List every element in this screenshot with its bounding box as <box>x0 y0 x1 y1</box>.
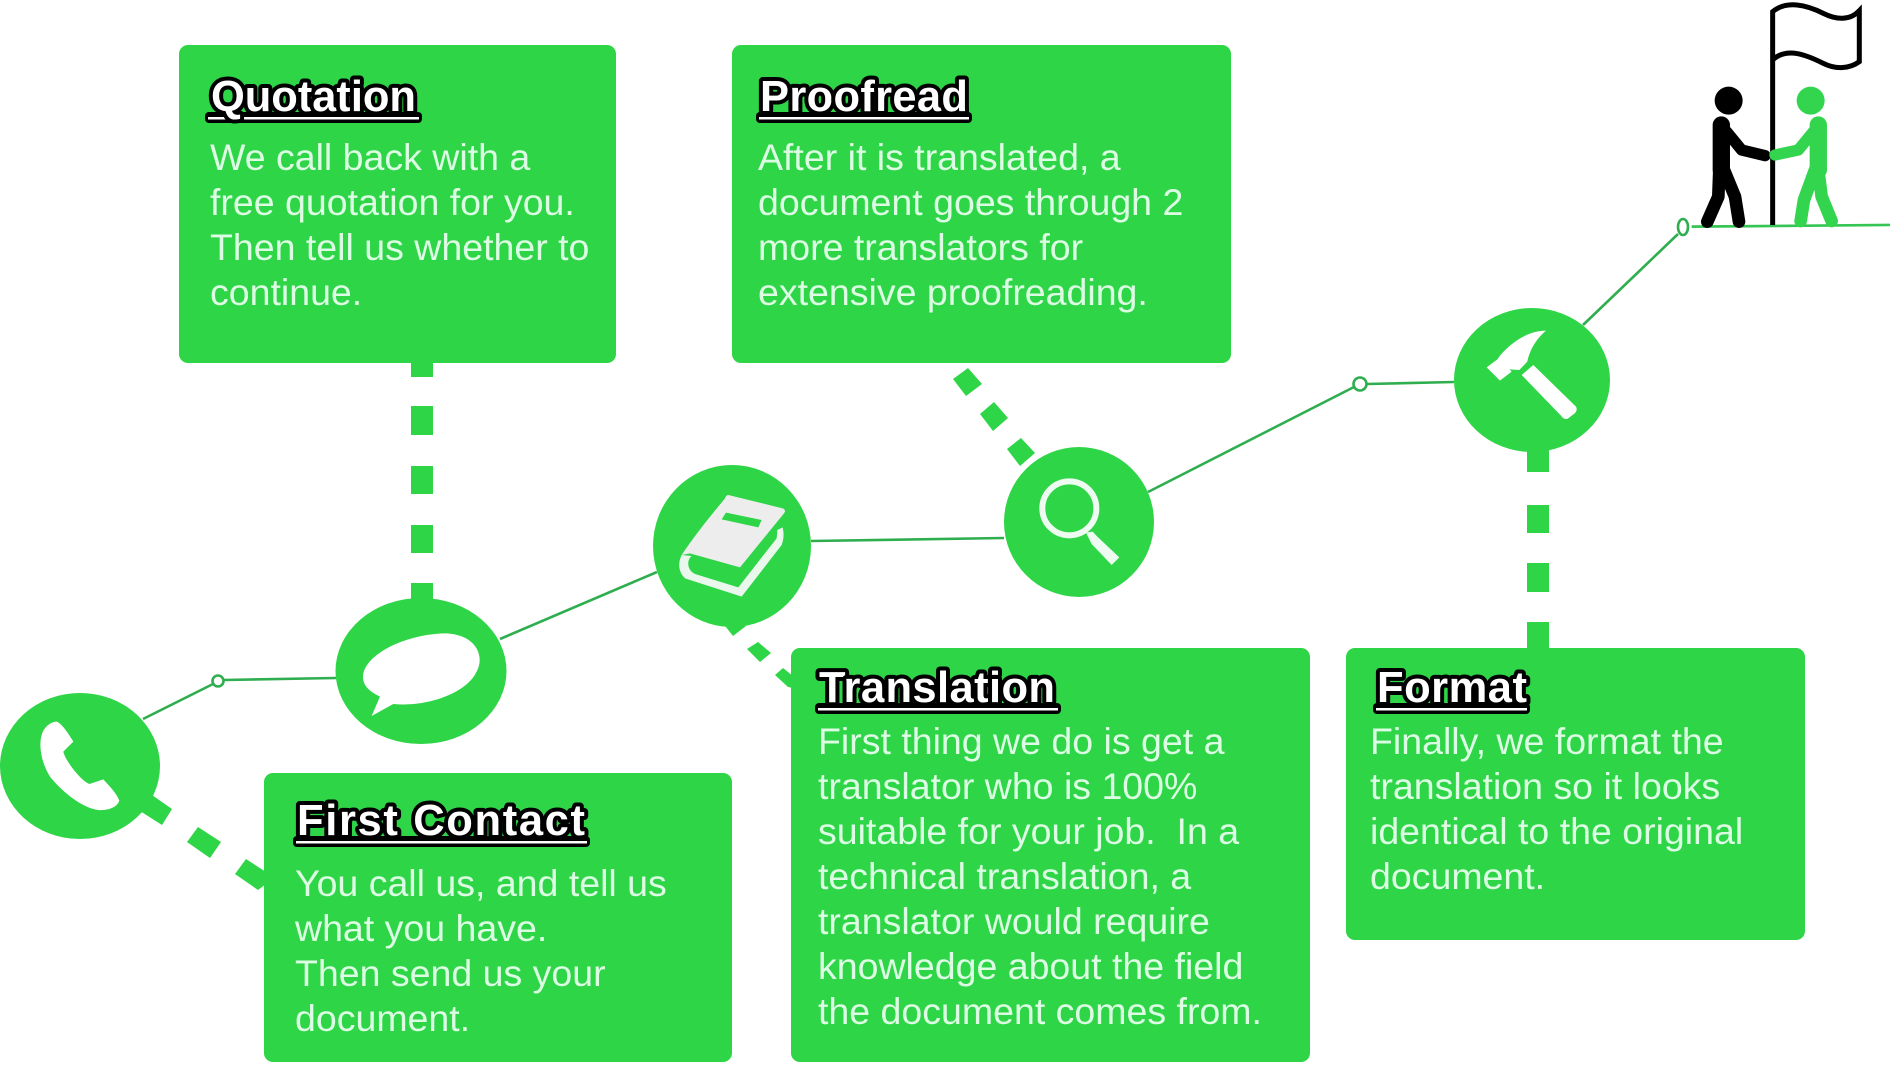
text: first contact body: Then send us your <box>295 952 606 994</box>
icon: flag and handshake figures <box>1692 5 1890 227</box>
icon: magnifier circle <box>1004 447 1154 597</box>
text: quotation body: Then tell us whether to <box>210 226 589 268</box>
dashed connector: quotation <box>411 360 433 603</box>
dashed connector: format <box>1527 448 1549 650</box>
black figure <box>1707 87 1765 222</box>
text: quotation body: We call back with a <box>210 136 530 178</box>
text: first contact body: document. <box>295 997 470 1039</box>
ground line <box>1692 225 1890 227</box>
text: translation body: technical translation, a <box>818 855 1191 897</box>
panel: format <box>1346 648 1805 940</box>
heading: proofread: Proofread <box>760 73 968 121</box>
text: proofread body: After it is translated, a <box>758 136 1121 178</box>
icon: hammer circle <box>1454 308 1610 452</box>
flag <box>1773 5 1859 225</box>
panel: proofread <box>732 45 1231 363</box>
text: translation body: the document comes from. <box>818 990 1262 1032</box>
text: translation body: suitable for your job. In a <box>818 810 1239 852</box>
dashed connector: translation <box>722 622 793 688</box>
heading: format: Format <box>1377 664 1527 712</box>
text: proofread body: extensive proofreading. <box>758 271 1148 313</box>
text: translation body: knowledge about the field <box>818 945 1243 987</box>
heading: first contact: First Contact <box>297 797 585 845</box>
text: quotation body: free quotation for you. <box>210 181 575 223</box>
dashed connector: proofread <box>953 368 1035 466</box>
text: translation body: translator would require <box>818 900 1210 942</box>
text: proofread body: more translators for <box>758 226 1083 268</box>
heading: quotation: Quotation <box>211 73 416 121</box>
text: translation body: First thing we do is get a <box>818 720 1225 762</box>
text: format body: Finally, we format the <box>1370 720 1724 762</box>
text: first contact body: You call us, and tell us <box>295 862 667 904</box>
icon: book circle <box>653 465 811 627</box>
text: format body: document. <box>1370 855 1545 897</box>
text: quotation body: continue. <box>210 271 362 313</box>
panel: translation <box>791 648 1310 1062</box>
icon: phone circle <box>0 693 160 839</box>
heading: translation: Translation <box>819 664 1055 712</box>
panel: first contact <box>264 773 732 1062</box>
text: first contact body: what you have. <box>294 907 547 949</box>
green figure <box>1775 87 1832 221</box>
progress path line <box>143 219 1688 719</box>
text: format body: identical to the original <box>1370 810 1743 852</box>
text: format body: translation so it looks <box>1370 765 1720 807</box>
text: translation body: translator who is 100% <box>818 765 1197 807</box>
panel: quotation <box>179 45 616 363</box>
dashed connector: first contact <box>140 795 266 890</box>
text: proofread body: document goes through 2 <box>758 181 1183 223</box>
icon: speech bubble circle <box>336 598 506 744</box>
